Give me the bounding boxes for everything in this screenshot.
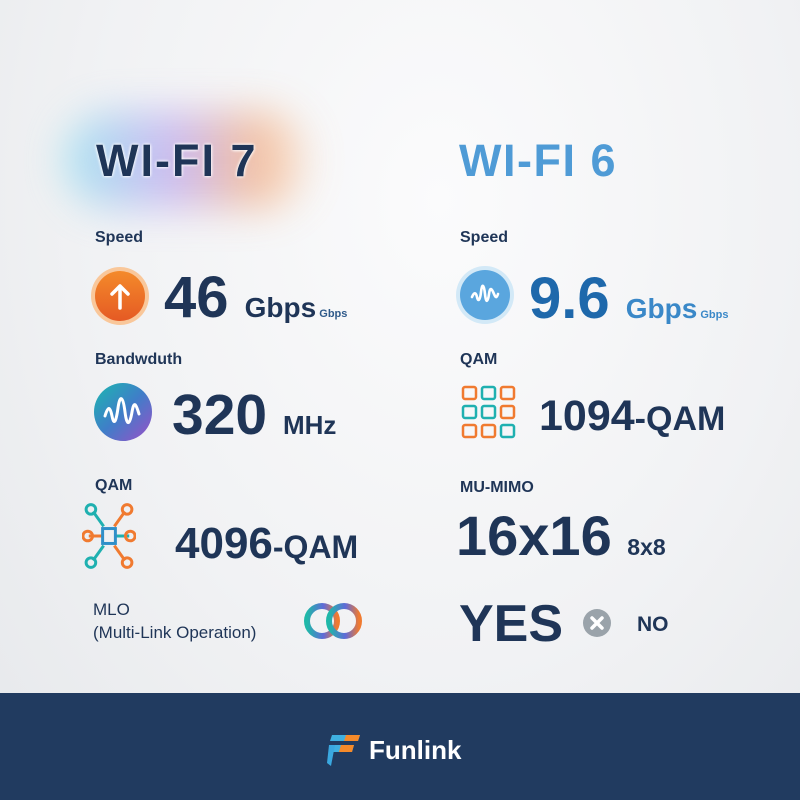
label: QAM (wifi7): QAM	[95, 477, 132, 494]
value: 46 Gbps: 46 Gbps Gbps	[164, 265, 347, 330]
value: YES: YES	[459, 595, 563, 653]
title: Wi-Fi 7: WI-FI 7	[96, 135, 257, 186]
value: 320 MHz: 320 MHz	[172, 383, 336, 447]
label: speed (wifi6): Speed	[460, 229, 508, 246]
label: bandwidth: Bandwduth	[95, 351, 182, 368]
icon: wave circle	[94, 383, 152, 441]
icon: grid	[462, 386, 516, 438]
row: QAM wifi6	[462, 386, 725, 440]
glow behind Wi-Fi 7 title	[65, 112, 310, 208]
label: MU-MIMO: MU-MIMO	[460, 479, 534, 496]
icon: orange arrow circle	[91, 267, 149, 325]
logo text: Funlink	[369, 735, 461, 765]
value: 1094-QAM: 1094-QAM	[539, 392, 725, 440]
label: MLO: (Multi-Link Operation)	[93, 623, 256, 642]
value: 16x16 8x8: 16x16 8x8	[456, 504, 666, 567]
footer	[0, 693, 800, 800]
logo icon	[327, 735, 360, 766]
icon: linked rings	[304, 603, 362, 639]
title: Wi-Fi 6: WI-FI 6	[459, 135, 617, 186]
label: QAM (wifi6): QAM	[460, 351, 497, 368]
value: 9.6 Gbps: 9.6 Gbps Gbps	[529, 266, 728, 331]
row: speed wifi7	[91, 265, 347, 330]
icon: gray x circle	[583, 609, 611, 637]
value: NO: NO	[637, 613, 668, 636]
label: MLO: MLO	[93, 600, 130, 619]
icon: blue wave circle	[456, 266, 514, 324]
icon: network	[82, 503, 136, 569]
row: speed wifi6	[456, 266, 728, 331]
label: speed (wifi7): Speed	[95, 229, 143, 246]
label: MLO	[93, 600, 256, 642]
value: 4096-QAM: 4096-QAM	[175, 519, 358, 568]
row: QAM wifi7	[82, 503, 358, 569]
row: bandwidth	[94, 383, 336, 447]
